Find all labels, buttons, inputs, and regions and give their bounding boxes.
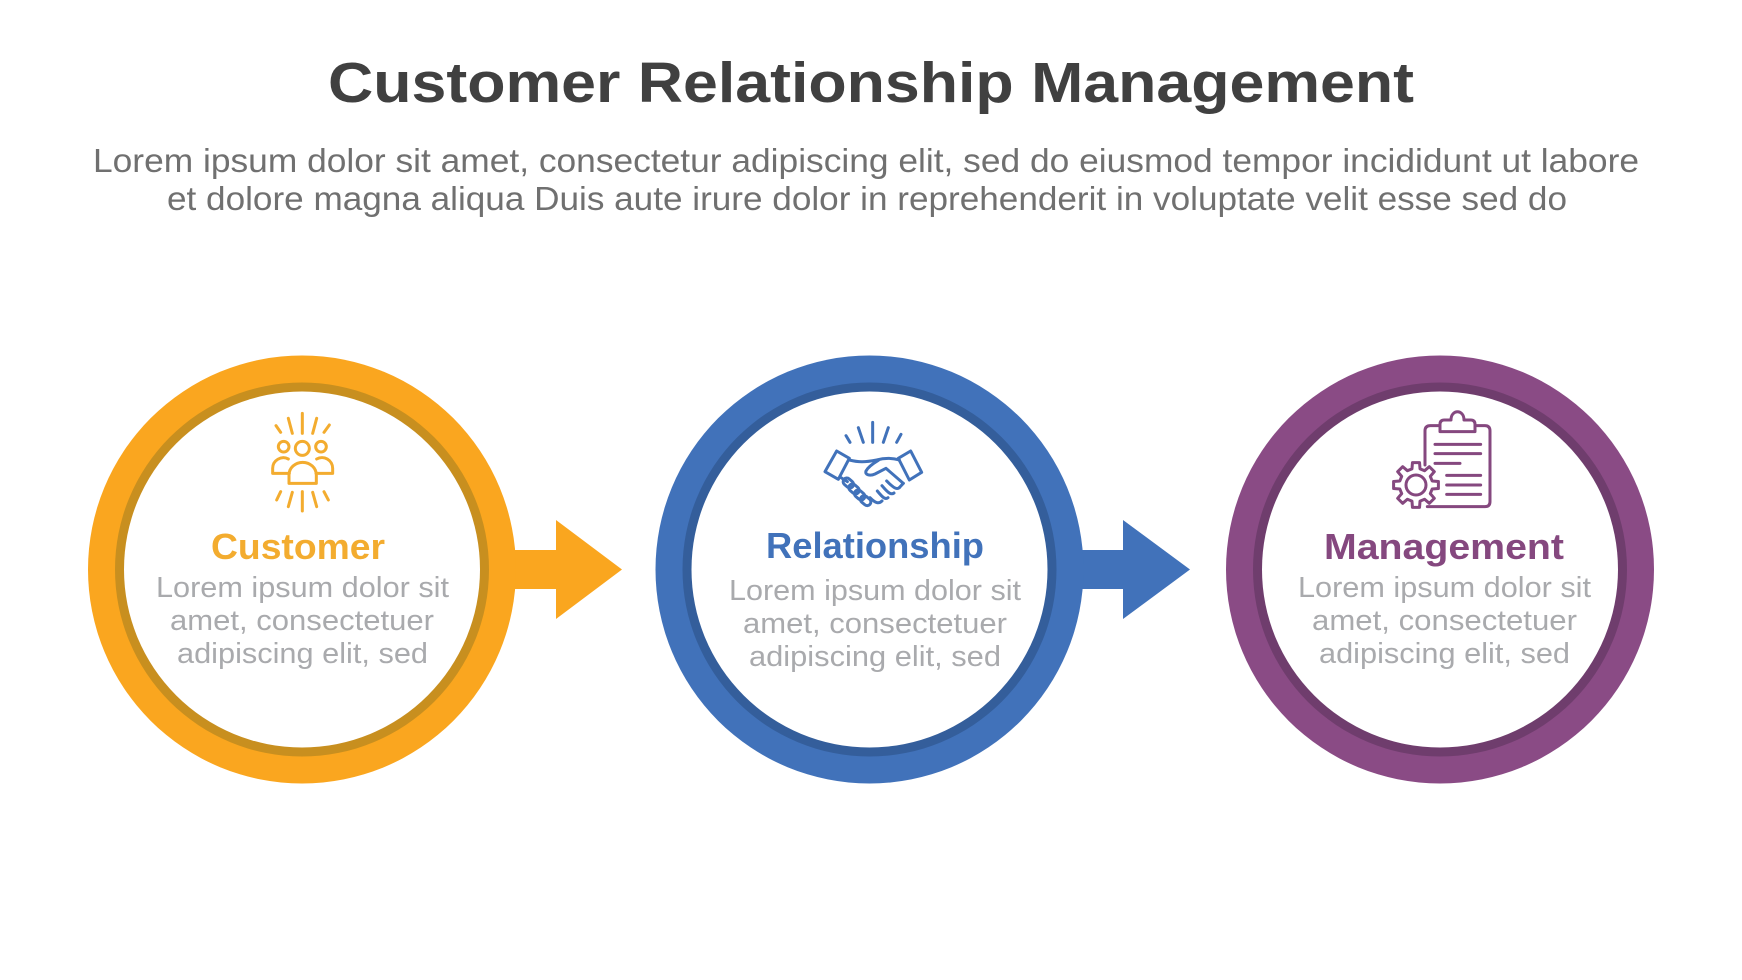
panel: customer [88,356,622,784]
panel: relationship [656,356,1190,784]
title: Customer Relationship Management [328,51,1414,115]
arrow: relationship to management [1075,520,1190,619]
subtitle text block [93,142,1639,217]
subtitle text block: et dolore magna aliqua Duis aute irure dolor in reprehenderit in voluptate velit esse sed do [167,180,1567,217]
icon: handshake [825,422,922,507]
text block: relationship: adipiscing elit, sed [749,641,1001,673]
text block: management: adipiscing elit, sed [1319,638,1570,670]
text block: relationship: Lorem ipsum dolor sit [729,575,1021,607]
text block: management: Lorem ipsum dolor sit [1298,572,1591,604]
text block: customer: adipiscing elit, sed [177,638,428,670]
panel: management [1226,356,1654,784]
icon: clipboard with gear [1394,412,1490,507]
text block: relationship [729,575,1021,673]
heading: relationship: Relationship [766,525,984,566]
text block: customer: amet, consectetuer [170,605,434,637]
icon: people group [273,413,333,511]
text block: customer: Lorem ipsum dolor sit [156,572,449,604]
arrow: customer to relationship [505,520,622,619]
heading: customer: Customer [211,526,385,567]
ring: management [1226,356,1654,784]
text block: management [1298,572,1591,670]
subtitle text block: Lorem ipsum dolor sit amet, consectetur adipiscing elit, sed do eiusmod tempor incididunt ut labore [93,142,1639,179]
text block: relationship: amet, consectetuer [743,608,1007,640]
ring: relationship [656,356,1084,784]
ring: customer [88,356,516,784]
text block: management: amet, consectetuer [1312,605,1577,637]
heading: management: Management [1324,526,1564,567]
text block: customer [156,572,449,670]
